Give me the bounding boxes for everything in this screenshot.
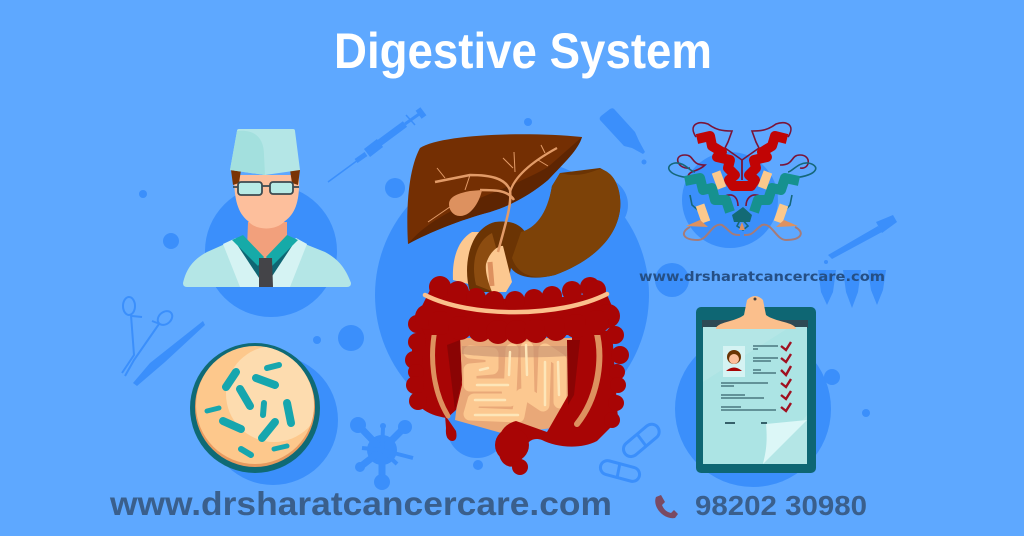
esophagus tube <box>453 232 500 292</box>
footer website: www.drsharatcancercare.com <box>109 485 612 522</box>
clip <box>716 296 796 329</box>
descending and sigmoid colon <box>495 326 629 475</box>
icon: syringe <box>328 109 424 182</box>
liver <box>407 134 582 244</box>
cap <box>230 129 300 175</box>
duodenum <box>486 246 512 292</box>
illustration: digestive organs <box>405 134 629 475</box>
footer phone number: 98202 30980 <box>695 490 867 521</box>
infographic canvas <box>110 32 897 518</box>
face <box>234 175 299 228</box>
small intestine <box>455 338 574 434</box>
colon band <box>425 294 607 312</box>
icon: doctor <box>183 129 351 287</box>
bile ducts and gallbladder <box>428 145 557 252</box>
bacteria <box>207 365 291 455</box>
icon: splash <box>350 417 413 490</box>
page curl <box>763 420 807 464</box>
check marks <box>781 342 791 411</box>
website watermark: www.drsharatcancercare.com <box>639 269 885 285</box>
glasses <box>233 182 299 195</box>
icon: protein structure <box>669 123 816 240</box>
icon: petri dish with bacteria <box>190 343 322 473</box>
shoulders and coat <box>183 244 351 287</box>
title: Digestive System <box>334 23 712 79</box>
hair <box>231 170 300 185</box>
stomach <box>512 169 620 277</box>
red helices <box>697 136 787 186</box>
icon: test tubes <box>818 270 886 308</box>
background circles and dots <box>139 118 870 487</box>
icon: clipboard with report <box>696 296 816 473</box>
icon: surgical scissors <box>122 297 175 376</box>
teal helices <box>685 178 799 212</box>
ascending colon <box>405 315 462 441</box>
icon: scalpel <box>133 321 205 386</box>
icon: phone <box>655 495 678 518</box>
icon: dropper <box>824 215 897 264</box>
orange helices <box>700 172 784 222</box>
icon: pills <box>599 421 662 483</box>
text lines <box>721 346 778 423</box>
transverse colon <box>415 276 620 344</box>
portrait <box>723 346 745 377</box>
icon: bottle <box>600 108 646 164</box>
